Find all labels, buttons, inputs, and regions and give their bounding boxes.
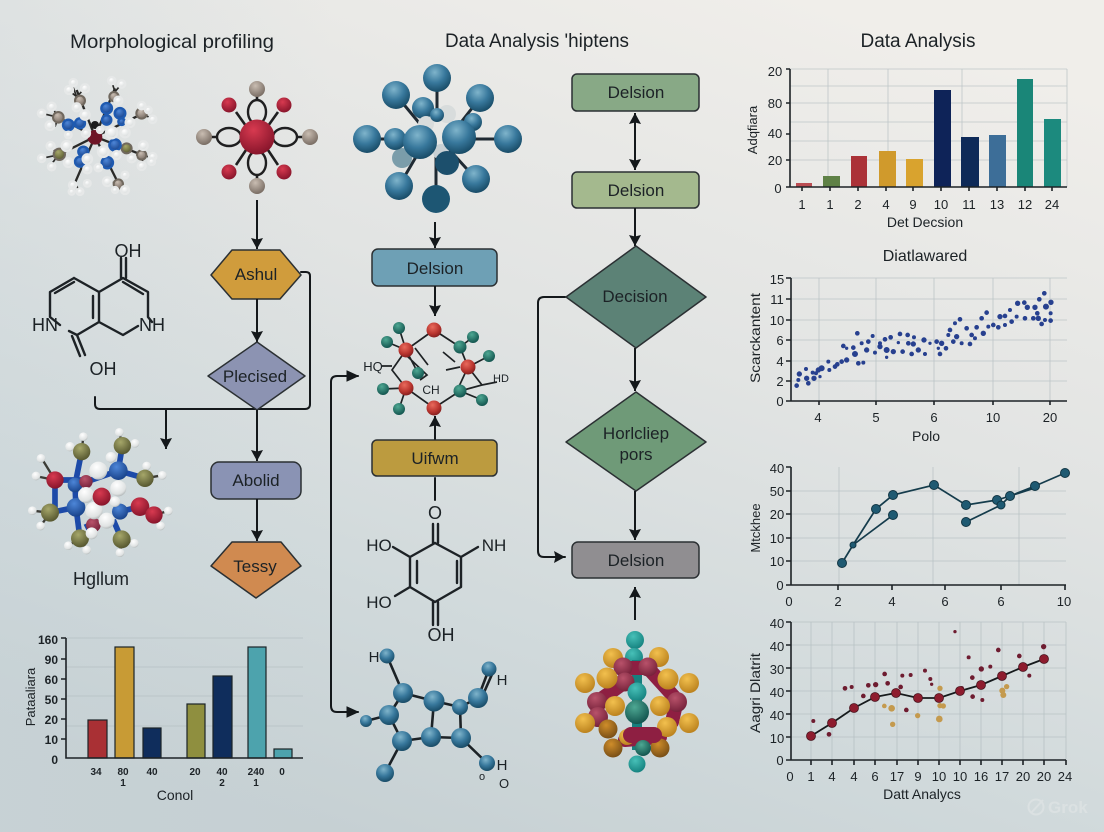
icon: blue bicyclic molecule: [360, 648, 509, 791]
chart: line and scatter plot: 16: [974, 769, 988, 784]
icon: coloured molecule Hgllum: [28, 428, 173, 557]
chart: bottom-left bar chart: 20: [189, 767, 201, 778]
flow node: Abolid box: [211, 462, 301, 499]
icon: red and teal ring molecule: HQ: [363, 359, 383, 374]
chart: line chart with teal markers: 0: [785, 594, 793, 609]
trend markers: [806, 654, 1048, 740]
chart: line chart with teal markers: 2: [834, 594, 842, 609]
chart: line and scatter plot: 10: [953, 769, 967, 784]
chart: line chart with teal markers: 20: [770, 507, 784, 522]
chart: bottom-left bar chart: 40: [216, 767, 228, 778]
chart: top-right bar chart: 20: [768, 64, 782, 79]
chart: scatter plot: 6: [930, 410, 938, 425]
chart: line and scatter plot: 40: [770, 616, 784, 631]
chart: top-right bar chart: 1: [798, 197, 806, 212]
icon: red and teal ring molecule: [363, 322, 509, 416]
flow node: second Delsion box: [572, 172, 699, 208]
flow connector: loop from Ashul to molecule: [95, 272, 310, 409]
flow node: Tessy pentagon: [211, 542, 301, 598]
connector: Uifwm to oxygen: [434, 478, 436, 500]
icon: red central atom with eight ligands: [196, 81, 318, 194]
chart: scatter plot: 2: [776, 374, 784, 389]
chart: top-right bar chart: 4: [882, 197, 890, 212]
icon: dense ball and stick molecule: [38, 77, 156, 195]
chart: line chart with teal markers: 10: [770, 531, 784, 546]
chart: top-right bar chart: 80: [768, 96, 782, 111]
flow node: Delsion blue box: Delsion: [407, 259, 463, 278]
flow node: second Delsion box: Delsion: [608, 181, 664, 200]
chart: top-right bar chart: 0: [774, 181, 782, 196]
icon: bicyclic structural formula: [32, 241, 165, 379]
dark red scatter: [811, 630, 1046, 737]
chart: line and scatter plot: Aagri Dlatrit: [747, 653, 763, 733]
chart: top-right bar chart: 11: [962, 197, 976, 212]
chart: line and scatter plot: 20: [1016, 769, 1030, 784]
chart: line and scatter plot: 1: [807, 769, 815, 784]
chart: scatter plot: 20: [1043, 410, 1057, 425]
icon: blue ball and stick molecule: [353, 64, 522, 213]
flow node: Horlcliep pors diamond: [566, 392, 706, 491]
chart: top-right bar chart: Adqfiara: [745, 105, 760, 154]
icon: quinone structural formula: NH: [482, 536, 506, 555]
flow node: Abolid box: Abolid: [232, 471, 280, 490]
icon: blue bicyclic molecule: o: [479, 771, 485, 783]
flow node: Plecised diamond: Plecised: [223, 367, 287, 386]
icon: blue bicyclic molecule: O: [499, 776, 509, 791]
chart: scatter plot: 11: [770, 292, 784, 307]
chart: bottom-left bar chart: 20: [45, 713, 58, 727]
chart: line and scatter plot: 17: [890, 769, 904, 784]
scatter points: [795, 291, 1053, 388]
icon: red and teal ring molecule: HD: [493, 373, 509, 385]
arrow: Delsion to ring molecule: [434, 286, 436, 316]
chart: top-right bar chart: 40: [768, 126, 782, 141]
flow node: Ashul hexagon: [211, 250, 301, 299]
icon: quinone structural formula: O: [428, 503, 442, 523]
chart: bottom-left bar chart: 60: [45, 673, 58, 687]
flow node: grey Delsion box: [572, 542, 699, 578]
chart: line chart with teal markers: [748, 461, 1071, 609]
flow node: Uifwm box: [372, 440, 497, 476]
bars: [88, 647, 292, 758]
arrow: atom to Ashul: [256, 200, 258, 249]
chart: bottom-left bar chart: 240: [248, 767, 265, 778]
arrow: loop drop: [165, 409, 167, 449]
chart: scatter plot: 10: [770, 313, 784, 328]
chart: bottom-left bar chart: 0: [51, 753, 58, 767]
flow node: Plecised diamond: [208, 342, 305, 410]
chart: line and scatter plot: 10: [932, 769, 946, 784]
bars: [796, 79, 1061, 187]
icon: gold crimson teal molecule: [575, 631, 699, 772]
chart: bottom-left bar chart: 1: [253, 778, 259, 789]
chart: bottom-left bar chart: 90: [45, 653, 58, 667]
heading: data analysis: Data Analysis: [860, 31, 976, 52]
chart: line and scatter plot: 0: [776, 753, 784, 768]
chart: line and scatter plot: 10: [770, 731, 784, 746]
chart: line chart with teal markers: 6: [997, 594, 1005, 609]
chart: bottom-left bar chart: 1: [120, 778, 126, 789]
chart: top-right bar chart: 2: [854, 197, 862, 212]
chart: bottom-left bar chart: [23, 633, 303, 803]
arrow: blue molecule to Delsion: [434, 222, 436, 248]
chart: bottom-left bar chart: 80: [117, 767, 129, 778]
chart: line and scatter plot: 40: [770, 708, 784, 723]
icon: quinone structural formula: HO: [366, 536, 392, 555]
watermark: Grok: [1028, 798, 1088, 817]
chart: line and scatter plot: 6: [871, 769, 879, 784]
chart: top-right bar chart: 24: [1045, 197, 1059, 212]
data markers: [838, 468, 1070, 568]
icon: quinone structural formula: HO: [366, 593, 392, 612]
icon: bicyclic structural formula: OH: [90, 359, 116, 379]
arrow: Plecised to Abolid: [256, 410, 258, 461]
chart: line and scatter plot: 40: [770, 639, 784, 654]
flow node: Ashul hexagon: Ashul: [235, 265, 277, 284]
flow node: top green Delsion box: Delsion: [608, 83, 664, 102]
chart: line chart with teal markers: 10: [770, 554, 784, 569]
chart: line chart with teal markers: 6: [941, 594, 949, 609]
chart: line and scatter plot: 17: [995, 769, 1009, 784]
flow node: Decision diamond: Decision: [602, 287, 668, 306]
flow node: Horlcliep pors diamond: Horlcliep: [603, 424, 669, 443]
chart: scatter plot: 5: [872, 410, 880, 425]
gold scatter: [882, 684, 1009, 727]
chart: top-right bar chart: 20: [768, 153, 782, 168]
molecule label: Hgllum: Hgllum: [73, 569, 129, 589]
chart: scatter plot: 6: [776, 333, 784, 348]
icon: blue bicyclic molecule: H: [369, 649, 379, 666]
icon: blue bicyclic molecule: H: [497, 672, 507, 689]
chart: bottom-left bar chart: 2: [219, 778, 225, 789]
chart: scatter plot: Scarckantent: [747, 293, 763, 383]
chart: bottom-left bar chart: 34: [90, 767, 102, 778]
arrow: Uifwm up to ring molecule: [434, 416, 436, 440]
flow node: Horlcliep pors diamond: pors: [619, 445, 653, 464]
chart: bottom-left bar chart: 160: [38, 633, 58, 647]
heading: morphological profiling: Morphological profiling: [70, 31, 274, 53]
icon: bicyclic structural formula: HN: [32, 315, 58, 335]
arrow: double-headed between Delsion boxes: [634, 113, 636, 170]
flow node: Delsion blue box: [372, 249, 497, 286]
trend line: [811, 659, 1044, 736]
chart: line and scatter plot: 4: [828, 769, 836, 784]
chart: line chart with teal markers: 10: [1057, 594, 1071, 609]
chart: line and scatter plot: 20: [1037, 769, 1051, 784]
chart: scatter plot: 15: [770, 272, 784, 287]
chart: line and scatter plot: Datt Analycs: [883, 786, 961, 802]
chart: line and scatter plot: 40: [770, 685, 784, 700]
chart: bottom-left bar chart: 40: [146, 767, 158, 778]
chart: line chart with teal markers: 40: [770, 461, 784, 476]
icon: bicyclic structural formula: NH: [139, 315, 165, 335]
arrow: Delsion to Decision: [634, 208, 636, 246]
icon: blue bicyclic molecule: H: [497, 757, 507, 774]
arrow: Abolid to Tessy: [256, 499, 258, 541]
chart: scatter plot: [747, 272, 1067, 444]
flow connector: left trunk with two arrows: [331, 371, 358, 717]
heading: data analysis pipelines: Data Analysis 'hiptens: [445, 31, 629, 52]
icon: red and teal ring molecule: CH: [422, 383, 440, 397]
chart: scatter plot: 4: [814, 410, 822, 425]
chart: top-right bar chart: 9: [909, 197, 917, 212]
chart: line and scatter plot: [747, 616, 1072, 802]
chart: line and scatter plot: 4: [850, 769, 858, 784]
chart: bottom-left bar chart: Conol: [157, 787, 193, 803]
flow node: Tessy pentagon: Tessy: [233, 557, 277, 576]
chart: bottom-left bar chart: 10: [45, 733, 58, 747]
chart: top-right bar chart: Det Decsion: [887, 214, 963, 230]
chart: line chart with teal markers: 50: [770, 484, 784, 499]
chart: top-right bar chart: 1: [826, 197, 834, 212]
watermark: Grok: Grok: [1048, 798, 1088, 817]
chart: line and scatter plot: 30: [770, 662, 784, 677]
arrow: Decision to Horlcliep: [634, 348, 636, 391]
flow node: Decision diamond: [566, 246, 706, 348]
chart: scatter plot: Polo: [912, 428, 940, 444]
chart: top-right bar chart: 10: [934, 197, 948, 212]
chart: top-right bar chart: [745, 64, 1067, 230]
chart: line and scatter plot: 24: [1058, 769, 1072, 784]
chart: line chart with teal markers: 0: [776, 578, 784, 593]
icon: quinone structural formula: OH: [428, 625, 454, 645]
data lines: [842, 473, 1065, 563]
chart: top-right bar chart: 12: [1018, 197, 1032, 212]
arrow: gold molecule up to Delsion: [634, 587, 636, 620]
flow node: top green Delsion box: [572, 74, 699, 111]
chart: line chart with teal markers: 4: [888, 594, 896, 609]
chart: line and scatter plot: 9: [914, 769, 922, 784]
chart: line and scatter plot: 0: [786, 769, 794, 784]
flow connector: decision bypass: [538, 297, 565, 557]
chart: line chart with teal markers: Mtckhee: [748, 503, 763, 553]
icon: quinone structural formula: [366, 503, 506, 645]
chart: top-right bar chart: 13: [990, 197, 1004, 212]
flow node: grey Delsion box: Delsion: [608, 551, 664, 570]
chart heading: Diatlawared: Diatlawared: [883, 248, 967, 265]
icon: bicyclic structural formula: OH: [114, 241, 142, 261]
chart: scatter plot: 10: [986, 410, 1000, 425]
arrow: Horlcliep to grey Delsion: [634, 491, 636, 540]
chart: bottom-left bar chart: 50: [45, 693, 58, 707]
arrow: Ashul to Plecised: [256, 299, 258, 342]
chart: bottom-left bar chart: Pataaliara: [23, 667, 38, 726]
chart: bottom-left bar chart: 0: [279, 767, 285, 778]
chart: scatter plot: 0: [776, 394, 784, 409]
flow node: Uifwm box: Uifwm: [411, 449, 459, 468]
chart: scatter plot: 4: [776, 354, 784, 369]
